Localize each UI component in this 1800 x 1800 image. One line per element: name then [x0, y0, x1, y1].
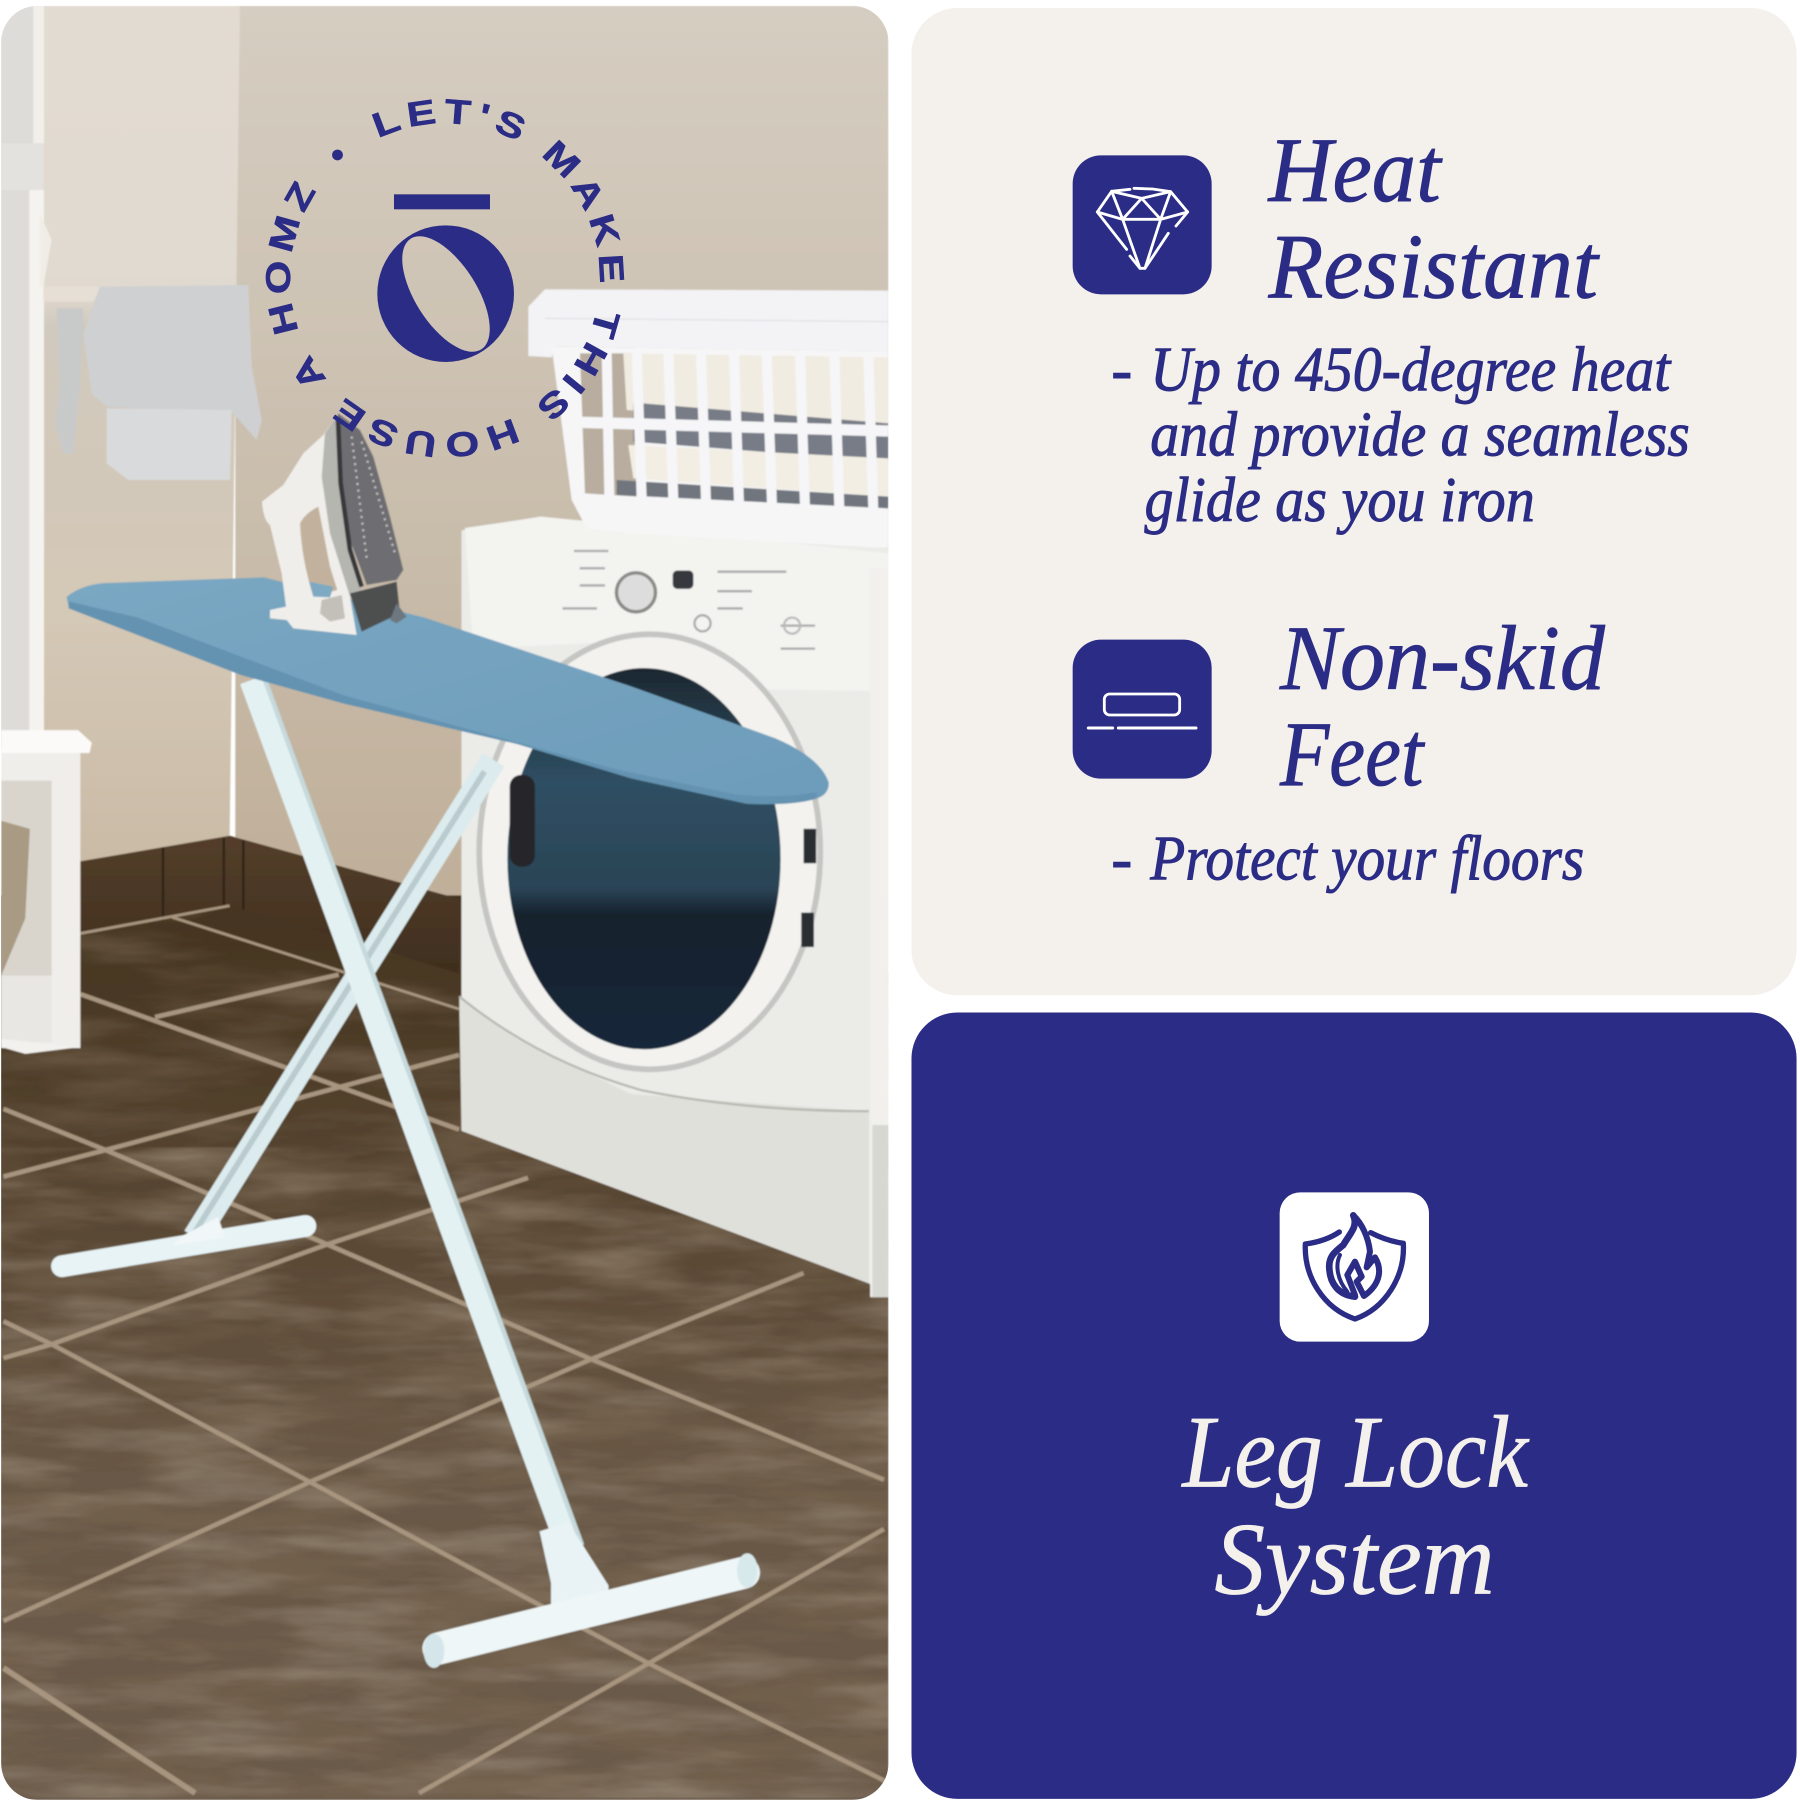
logo: circular tagline: A: [563, 170, 612, 216]
photo: iron: [262, 413, 407, 635]
logo: circular tagline: L: [367, 101, 405, 145]
logo: circular tagline: H: [481, 411, 524, 457]
icon: non-skid foot: [1073, 640, 1212, 779]
heading: Heat Resistant: Heat: [1268, 119, 1443, 221]
photo: ironing board: [67, 577, 829, 804]
photo: left wall: [34, 6, 240, 872]
panel: leg lock system: [911, 1012, 1797, 1799]
panel: product photo: [0, 6, 889, 1800]
logo: circular tagline: E: [591, 253, 630, 284]
photo: long board leg: [253, 677, 608, 1635]
photo: long leg T-foot: [424, 1553, 758, 1668]
logo: circular tagline: S: [363, 409, 403, 455]
photo: hanging towel: [43, 285, 262, 480]
logo: circular tagline: S: [530, 380, 576, 428]
photo: dryer door: [476, 631, 823, 1072]
heading: Leg Lock System: Leg Lock: [1181, 1396, 1530, 1510]
heading: Heat Resistant: [1268, 119, 1600, 317]
brand logo badge: [260, 93, 630, 464]
icon: diamond: [1073, 155, 1212, 294]
logo: o with macron: [377, 194, 514, 362]
logo: circular tagline: H: [262, 299, 306, 338]
heading: Non-skid Feet: [1279, 607, 1606, 805]
photo: right wall: [235, 6, 889, 918]
text: heat resistant description: glide as you iron: [1145, 465, 1535, 535]
photo scene: [0, 6, 889, 1800]
text: heat resistant description: [1111, 334, 1690, 535]
logo: circular tagline: A: [284, 349, 333, 397]
logo: circular tagline: T: [583, 306, 626, 342]
light veining: [0, 1148, 889, 1798]
logo: circular tagline: [260, 93, 630, 464]
logo: circular tagline: M: [262, 212, 308, 256]
logo: circular tagline: E: [327, 391, 373, 438]
logo: circular tagline: I: [555, 367, 592, 400]
text: non-skid description: Protect your floors: [1149, 823, 1584, 893]
text: heat resistant description: and provide a seamless: [1150, 400, 1690, 470]
photo: laundry basket: [528, 289, 888, 548]
photo: baseboard tile: [69, 836, 459, 973]
logo: circular tagline: H: [566, 336, 614, 382]
text: heat resistant description: -: [1111, 334, 1132, 404]
heading: Non-skid Feet: Non-skid: [1279, 607, 1606, 709]
text: non-skid description: -: [1111, 823, 1132, 893]
logo: circular tagline: M: [535, 134, 587, 186]
heading: Heat Resistant: Resistant: [1268, 215, 1600, 317]
photo: short board leg: [193, 760, 494, 1238]
panel background: navy: [911, 1012, 1797, 1799]
panel: features: [911, 8, 1797, 995]
logo: circular tagline: O: [444, 423, 481, 464]
photo: short leg T-foot: [62, 1217, 305, 1266]
logo: circular tagline: T: [443, 93, 472, 133]
photo: tile grout lines: [3, 906, 884, 1793]
text: heat resistant description: Up to 450-degree heat: [1150, 334, 1672, 404]
photo: washing machine: [459, 517, 889, 1297]
icon: flame shield: [1280, 1192, 1429, 1342]
photo: floor: [0, 895, 889, 1800]
logo: circular tagline: ': [475, 97, 493, 137]
photo: white door frame: [0, 6, 52, 750]
heading: Leg Lock System: System: [1215, 1502, 1495, 1616]
heading: Leg Lock System: [1181, 1396, 1530, 1616]
logo: circular tagline: O: [260, 261, 298, 294]
photo: white bench: [1, 730, 92, 1054]
logo: circular tagline: K: [581, 210, 626, 250]
logo: circular tagline: S: [490, 103, 531, 149]
logo: circular tagline: E: [404, 93, 438, 135]
logo: circular tagline: Z: [277, 176, 323, 218]
logo: separator dot: [332, 150, 343, 160]
logo: circular tagline: U: [403, 421, 439, 464]
photo: floor marble texture: [0, 907, 889, 1798]
dark veining: [0, 907, 889, 1798]
heading: Non-skid Feet: Feet: [1279, 703, 1426, 805]
panel background: cream: [911, 8, 1797, 995]
